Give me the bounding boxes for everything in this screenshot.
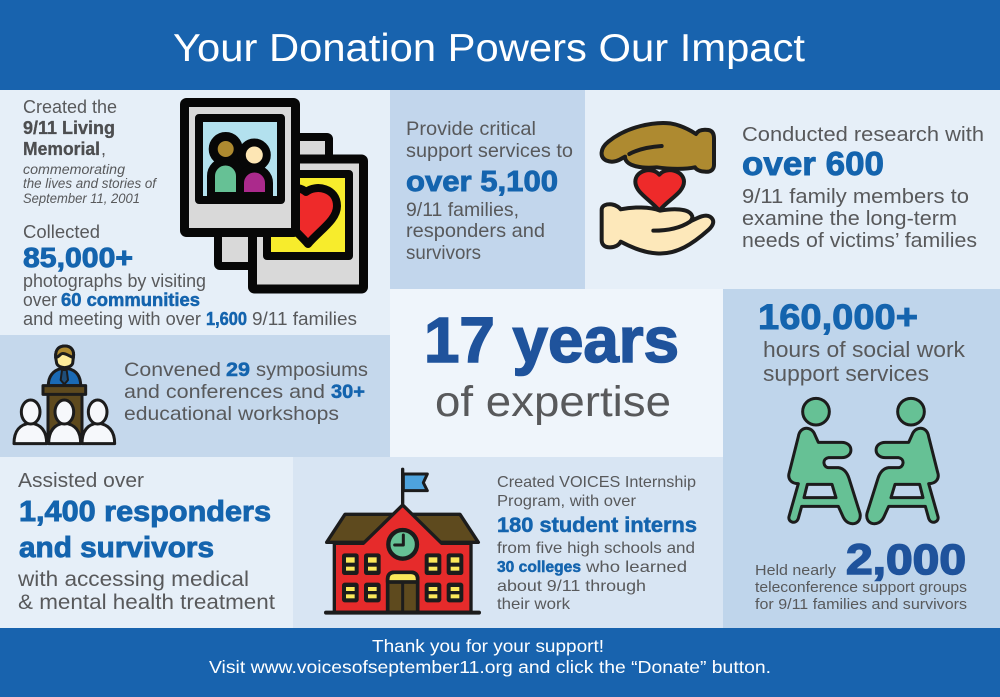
- footer banner: [0, 628, 1000, 697]
- panel: research: Conducted research with: [742, 123, 984, 146]
- panel: research: [585, 90, 1000, 289]
- panel: responders and survivors: and survivors: [19, 532, 214, 564]
- text: photographs collected: 60 communities: [61, 290, 200, 310]
- text: living memorial intro: 9/11 Living: [23, 118, 115, 138]
- icon: two seated people: [789, 398, 938, 524]
- text: living memorial intro: September 11, 2001: [23, 191, 140, 206]
- panel: research: over 600: [742, 145, 884, 182]
- footer banner: Thank you for your support!: [372, 636, 604, 656]
- panel: support services: over 5,100: [406, 166, 558, 198]
- header banner: [0, 0, 1000, 90]
- text: living memorial intro: Memorial: [23, 139, 100, 159]
- panel: social work hours: Held nearly: [755, 562, 837, 579]
- panel: responders and survivors: with accessing medical: [17, 567, 249, 591]
- panel: internship program: Created VOICES Internship: [497, 474, 696, 491]
- text: photographs collected: over: [23, 290, 57, 310]
- panel: responders and survivors: & mental health treatment: [18, 590, 275, 614]
- panel: living memorial: [0, 90, 390, 335]
- title: Your Donation Powers Our Impact: [173, 27, 805, 70]
- text: living memorial intro: commemorating: [23, 162, 126, 177]
- panel: social work hours: [723, 289, 1000, 628]
- panel: research: needs of victims’ families: [742, 229, 977, 252]
- text: living memorial intro: Created the: [23, 97, 117, 117]
- text: photographs collected: [23, 222, 357, 329]
- panel: social work hours: for 9/11 families and survivors: [755, 596, 967, 613]
- text: living memorial intro: [23, 97, 157, 206]
- panel: support services: 9/11 families,: [406, 199, 519, 221]
- panel: symposiums: symposiums: [256, 359, 368, 381]
- panel: symposiums: Convened: [124, 359, 221, 381]
- panel: symposiums: educational workshops: [124, 403, 339, 425]
- text: photographs collected: 1,600: [206, 309, 247, 329]
- panel: support services: responders and: [406, 220, 545, 242]
- panel: internship program: about 9/11 through: [497, 578, 646, 595]
- panel: support services: [390, 90, 585, 289]
- panel: 17 years of expertise: of expertise: [435, 378, 671, 426]
- panel: support services: support services to: [406, 140, 573, 162]
- panel: internship program: who learned: [585, 559, 687, 576]
- panel: internship program: 30 colleges: [497, 559, 581, 576]
- panel: internship program: [293, 457, 723, 628]
- panel: symposiums: and conferences and: [124, 381, 325, 403]
- panel: social work hours: teleconference support groups: [755, 579, 967, 596]
- panel: research: examine the long-term: [742, 207, 957, 230]
- text: photographs collected: and meeting with over: [23, 309, 201, 329]
- panel: support services: Provide critical: [406, 118, 536, 140]
- icon: school building: [326, 469, 479, 613]
- panel: internship program: 180 student interns: [497, 514, 697, 537]
- panel: social work hours: hours of social work: [763, 337, 966, 362]
- panel: support services: survivors: [406, 242, 481, 264]
- panel: social work hours: 160,000+: [758, 298, 918, 337]
- panel: responders and survivors: 1,400 responders: [19, 496, 271, 528]
- panel: social work hours: 2,000: [846, 536, 966, 584]
- text: photographs collected: Collected: [23, 222, 100, 242]
- icon: stacked photographs: [184, 102, 364, 289]
- text: photographs collected: photographs by visiting: [23, 271, 206, 291]
- footer banner: Visit www.voicesofseptember11.org and click the “Donate” button.: [209, 657, 771, 677]
- panel: responders and survivors: [0, 457, 293, 628]
- panel: research: 9/11 family members to: [742, 185, 969, 208]
- panel: internship program: from five high schools and: [497, 540, 695, 557]
- panel: symposiums: 30+: [331, 381, 365, 403]
- icon: hands holding heart: [602, 123, 714, 253]
- panel: internship program: their work: [497, 596, 571, 613]
- panel: responders and survivors: Assisted over: [18, 469, 144, 492]
- panel: symposiums: [0, 335, 390, 457]
- panel: 17 years of expertise: [390, 289, 723, 457]
- text: living memorial intro: the lives and stories of: [23, 176, 157, 191]
- text: photographs collected: 9/11 families: [252, 309, 357, 329]
- icon: speaker at podium: [14, 346, 115, 444]
- panel: symposiums: 29: [226, 359, 250, 381]
- text: living memorial intro: ,: [101, 139, 106, 159]
- panel: 17 years of expertise: 17 years: [424, 304, 679, 376]
- text: photographs collected: 85,000+: [23, 242, 133, 273]
- panel: internship program: Program, with over: [497, 493, 637, 510]
- panel: social work hours: support services: [763, 361, 929, 386]
